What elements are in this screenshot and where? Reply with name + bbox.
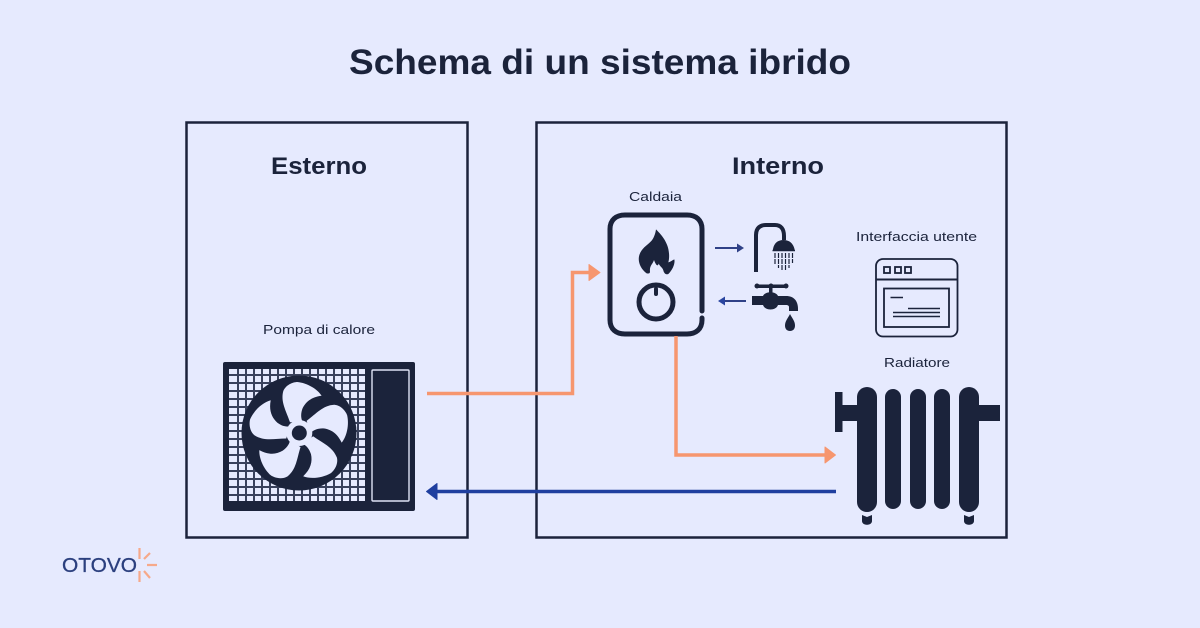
logo: otovo <box>62 548 157 582</box>
panel: interno <box>536 122 1006 538</box>
arrow: boiler to shower <box>715 244 744 252</box>
logo: otovo: OTOVO <box>62 555 137 577</box>
icon: heat pump <box>223 362 415 511</box>
heading: esterno: Esterno <box>271 153 367 180</box>
panel: esterno <box>186 122 468 538</box>
arrow: radiator to heat pump <box>426 484 836 500</box>
arrow: heat pump to boiler <box>427 264 600 394</box>
icon: tap <box>752 284 798 331</box>
title: Schema di un sistema ibrido <box>349 43 851 82</box>
icon: boiler <box>610 215 702 334</box>
icon: shower <box>756 225 795 272</box>
label: radiatore: Radiatore <box>884 355 950 370</box>
label: interfaccia utente: Interfaccia utente <box>856 229 977 244</box>
icon: radiator <box>835 387 1000 525</box>
heading: interno: Interno <box>732 153 824 180</box>
label: pompa di calore: Pompa di calore <box>263 322 375 337</box>
arrow: boiler to radiator <box>676 336 836 463</box>
arrow: tap to boiler <box>718 296 746 306</box>
icon: user interface <box>876 259 958 336</box>
label: caldaia: Caldaia <box>629 189 683 204</box>
